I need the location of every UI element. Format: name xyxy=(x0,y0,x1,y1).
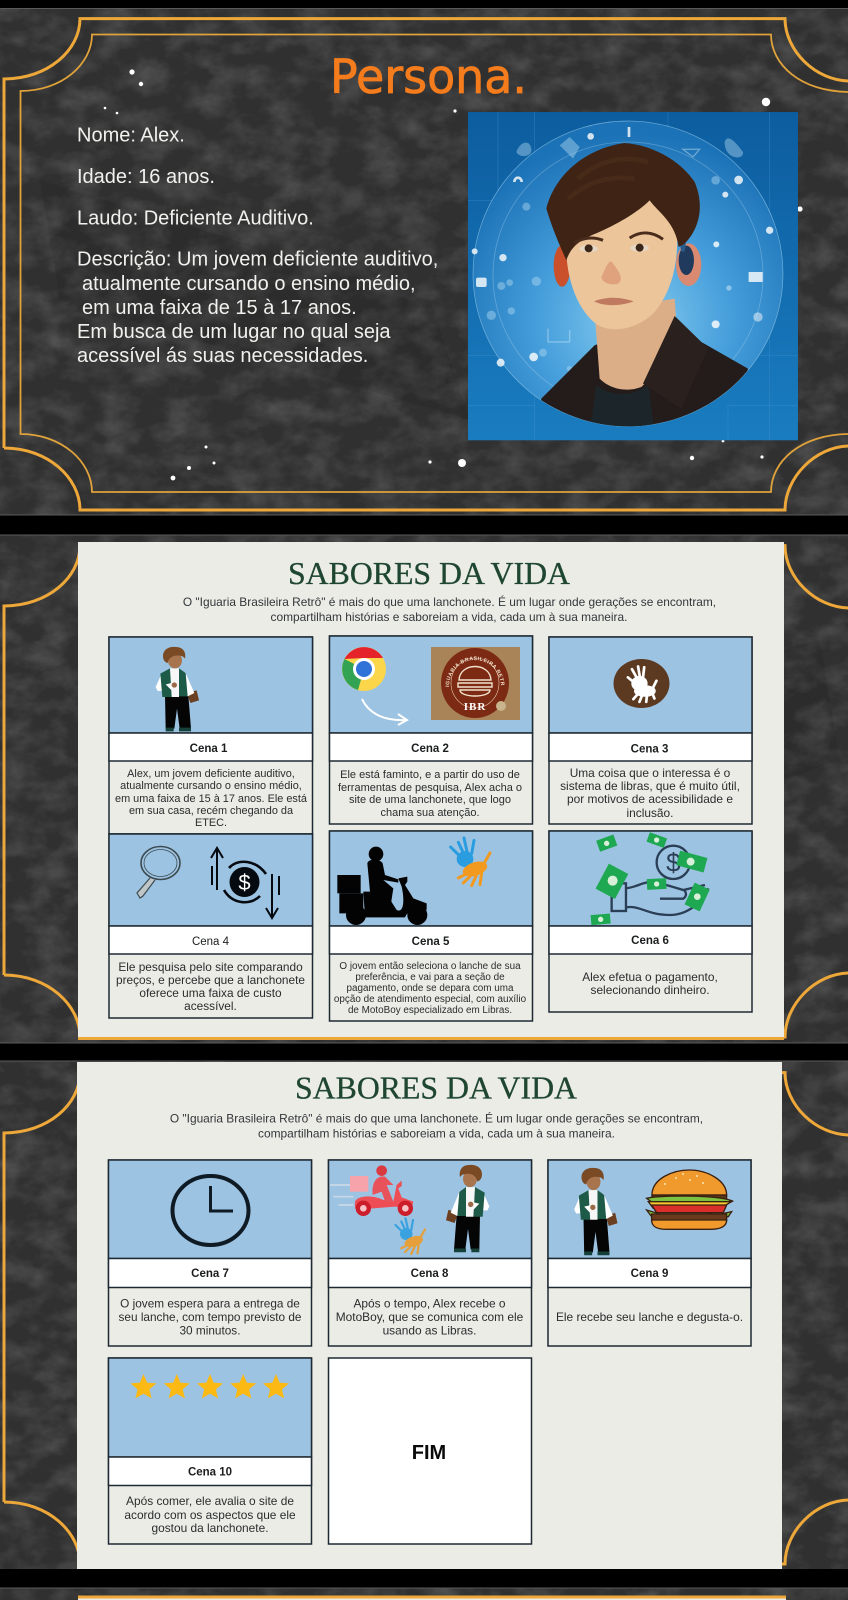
icon: delivery moped silhouette xyxy=(337,847,427,925)
ornate gold frame xyxy=(4,19,848,510)
scene text: Após comer, ele avalia o site de xyxy=(126,1494,294,1508)
scene text xyxy=(116,960,305,1013)
persona details text: acessível ás suas necessidades. xyxy=(77,345,368,367)
scene text: O jovem espera para a entrega de xyxy=(120,1296,300,1310)
icon: red delivery moped xyxy=(330,1165,413,1216)
card: Cena 2: Cena 2 xyxy=(411,743,449,755)
card: Cena 3: Cena 3 xyxy=(631,744,668,756)
scene text xyxy=(338,769,522,819)
icon: sign language badge xyxy=(614,659,670,708)
arrow to site logo xyxy=(362,699,407,725)
scene text: Alex efetua o pagamento, xyxy=(582,970,718,984)
persona details text xyxy=(77,124,438,367)
scene text: usando as Libras. xyxy=(383,1324,476,1338)
intro text: O "Iguaria Brasileira Retrô" é mais do que uma lanchonete. É um lugar onde gerações se encontram, xyxy=(170,1110,703,1126)
scene text: chama sua atenção. xyxy=(380,807,480,819)
portrait illustration: Alex with hearing aid xyxy=(468,112,798,440)
scene text: opção de atendimento especial, com auxílio xyxy=(334,994,527,1005)
frame of third slide xyxy=(4,1073,848,1564)
heading: SABORES DA VIDA xyxy=(295,1070,577,1106)
card: Cena 4 xyxy=(109,834,312,1018)
icon: Alex standing xyxy=(574,1168,617,1255)
card: FIM: FIM xyxy=(412,1442,446,1464)
scene text: atualmente cursando o ensino médio, xyxy=(120,780,302,792)
scene text: sistema de libras, que é muito útil, xyxy=(560,779,740,793)
scene text: ferramentas de pesquisa, Alex acha o xyxy=(338,782,522,794)
panel background xyxy=(78,542,784,1037)
card: Cena 6: Cena 6 xyxy=(631,935,669,947)
scene text: inclusão. xyxy=(627,806,673,820)
scene text: MotoBoy, que se comunica com ele xyxy=(336,1310,524,1324)
scene text: por motivos de acessibilidade e xyxy=(567,792,733,806)
scene text xyxy=(336,1296,524,1338)
scene text: acordo com os aspectos que ele xyxy=(124,1508,296,1522)
scene text xyxy=(124,1494,296,1535)
scene text xyxy=(582,970,718,997)
icon: clock xyxy=(172,1176,248,1245)
icon: hamburger xyxy=(647,1170,732,1229)
scene text: oferece uma faixa de custo xyxy=(139,986,282,1000)
icon: magnifying glass xyxy=(137,846,180,898)
logo: Iguaria Brasileira Retro xyxy=(431,647,520,720)
scene text: Ele pesquisa pelo site comparando xyxy=(118,960,303,974)
card: FIM xyxy=(328,1358,532,1544)
logo: Iguaria Brasileira Retro: IGUARIA BRASILEIRA RETRO xyxy=(445,656,504,687)
icon: dollar with arrows xyxy=(211,848,279,918)
scene text: preferência, e vai para a seção de xyxy=(355,972,505,983)
scene text: em sua casa, recém chegando da xyxy=(129,805,294,817)
scene text: Após o tempo, Alex recebe o xyxy=(353,1296,506,1310)
card: Cena 6 xyxy=(549,831,752,1012)
card: Cena 1 xyxy=(109,637,312,834)
chalk dust dots xyxy=(104,69,803,480)
card: Cena 9: Cena 9 xyxy=(631,1268,668,1280)
scene text: acessível. xyxy=(184,999,237,1013)
scene text: preços, e percebe que a lanchonete xyxy=(116,973,305,987)
scene text xyxy=(560,766,740,820)
icon: sign language hands xyxy=(451,838,490,886)
card: Cena 4: Cena 4 xyxy=(192,936,230,948)
next slide top edge xyxy=(78,1597,786,1600)
icon: five star rating xyxy=(130,1374,289,1398)
scene text: Alex, um jovem deficiente auditivo, xyxy=(127,768,295,780)
card: Cena 10 xyxy=(108,1358,312,1544)
card: Cena 7 xyxy=(108,1160,312,1346)
scene text: O jovem então seleciona o lanche de sua xyxy=(339,961,521,972)
panel background xyxy=(77,1062,782,1569)
icon: sign language hands xyxy=(396,1218,425,1254)
persona details text: Descrição: Um jovem deficiente auditivo, xyxy=(77,248,438,270)
scene text xyxy=(334,961,527,1016)
scene text: ETEC. xyxy=(195,817,227,829)
scene text: site de uma lanchonete, que logo xyxy=(349,794,511,806)
persona details text: em uma faixa de 15 à 17 anos. xyxy=(82,297,357,319)
intro text: compartilham histórias e saboreiam a vida, cada um à sua maneira. xyxy=(258,1126,615,1140)
scene text: selecionando dinheiro. xyxy=(590,983,710,997)
icon: chrome browser xyxy=(342,647,386,691)
card: Cena 9 xyxy=(548,1160,751,1346)
intro text: O "Iguaria Brasileira Retrô" é mais do que uma lanchonete. É um lugar onde gerações se encontram, xyxy=(183,594,716,609)
frame of second slide xyxy=(4,546,848,1037)
persona details text: atualmente cursando o ensino médio, xyxy=(82,273,416,295)
scene text: 30 minutos. xyxy=(180,1324,240,1338)
card: Cena 3 xyxy=(549,637,752,824)
persona details text: Nome: Alex. xyxy=(77,124,185,146)
card: Cena 2 xyxy=(328,635,534,825)
scene text: em uma faixa de 15 à 17 anos. Ele está xyxy=(115,793,308,805)
persona details text: Em busca de um lugar no qual seja xyxy=(77,321,391,343)
intro text xyxy=(170,1110,703,1140)
card: Cena 5 xyxy=(330,831,532,1021)
title: Persona: Persona. xyxy=(330,50,527,105)
panel: persona slide xyxy=(4,19,848,510)
icon: hand receiving money xyxy=(591,832,710,925)
icon: Alex standing xyxy=(446,1165,489,1252)
scene text: de MotoBoy especializado em Libras. xyxy=(348,1005,512,1016)
card: Cena 8: Cena 8 xyxy=(411,1268,449,1280)
scene text: Ele recebe seu lanche e degusta-o. xyxy=(556,1310,743,1324)
card: Cena 7: Cena 7 xyxy=(191,1268,229,1280)
scene text xyxy=(119,1296,302,1338)
scene text: gostou da lanchonete. xyxy=(151,1521,269,1535)
card: Cena 8 xyxy=(328,1160,532,1346)
icon: Alex standing xyxy=(156,647,199,731)
scene text xyxy=(115,768,308,829)
scene text: pagamento, onde se depara com uma xyxy=(347,983,514,994)
logo: Iguaria Brasileira Retro: IBR xyxy=(464,701,486,713)
heading: SABORES DA VIDA xyxy=(288,556,570,591)
scene text: Uma coisa que o interessa é o xyxy=(570,766,731,780)
scene text: Ele está faminto, e a partir do uso de xyxy=(340,769,520,781)
persona details text: Idade: 16 anos. xyxy=(77,166,215,188)
scene text: seu lanche, com tempo previsto de xyxy=(119,1310,302,1324)
intro text xyxy=(183,594,716,624)
card: Cena 1: Cena 1 xyxy=(190,743,228,755)
icon: dollar with arrows: $ xyxy=(238,870,251,895)
panel: Sabores da Vida, scenes 7 to 10 xyxy=(77,1062,782,1569)
persona details text: Laudo: Deficiente Auditivo. xyxy=(77,208,314,230)
card: Cena 5: Cena 5 xyxy=(412,936,450,948)
panel: Sabores da Vida, scenes 1 to 6 xyxy=(78,542,784,1040)
intro text: compartilham histórias e saboreiam a vida, cada um à sua maneira. xyxy=(271,610,627,624)
icon: hand receiving money: $ xyxy=(666,848,681,878)
card: Cena 10: Cena 10 xyxy=(188,1466,232,1478)
